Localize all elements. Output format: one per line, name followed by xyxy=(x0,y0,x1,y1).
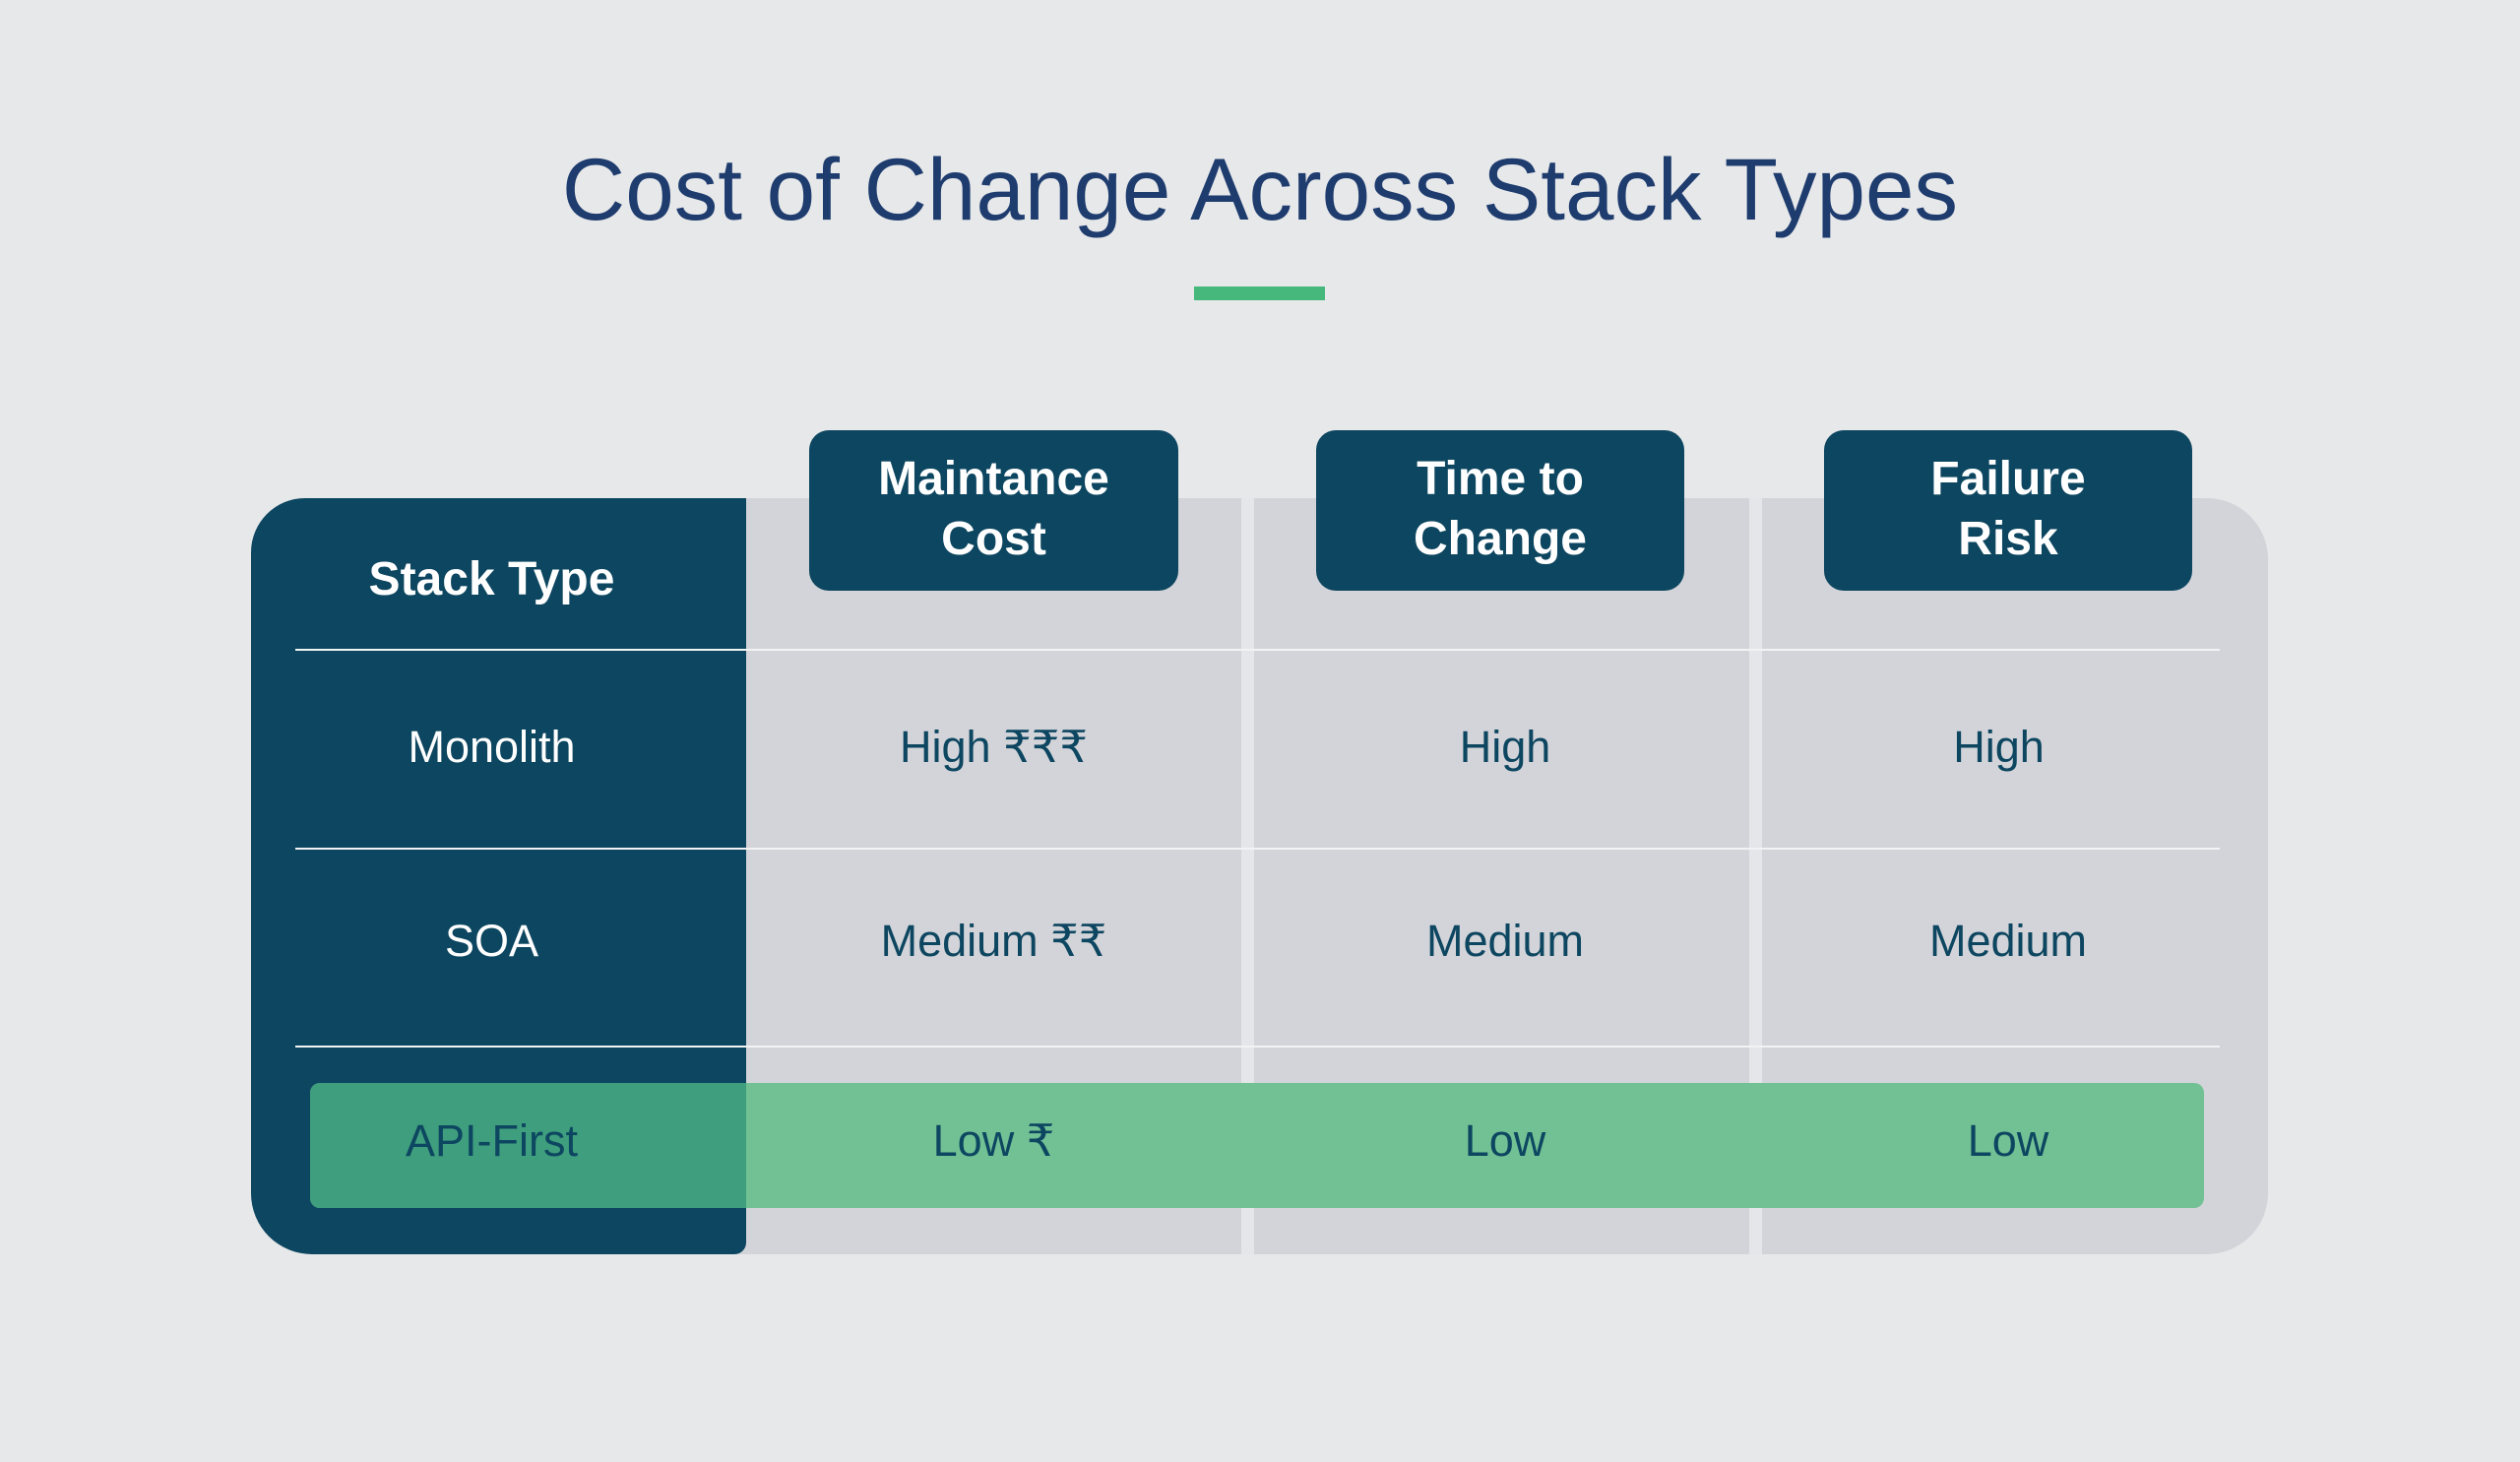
row: SOA: Medium xyxy=(1929,916,2087,966)
header: Time to Change: Change xyxy=(1414,512,1587,565)
highlight row: API-First xyxy=(310,1083,2204,1208)
header: Maintance Cost: Maintance xyxy=(878,453,1109,504)
row: SOA: SOA xyxy=(445,916,538,966)
row: Monolith: High xyxy=(1460,722,1550,772)
row: API-First: Low xyxy=(1968,1115,2048,1166)
row dividers xyxy=(295,649,2220,651)
row: API-First: Low ₹ xyxy=(933,1115,1054,1166)
table xyxy=(251,498,2268,1254)
row: Monolith xyxy=(408,722,2045,772)
title: Cost of Change Across Stack Types xyxy=(562,140,1958,238)
row: API-First: Low xyxy=(1465,1115,1545,1166)
row: SOA: Medium xyxy=(1426,916,1584,966)
row: SOA: Medium ₹₹ xyxy=(881,916,1106,966)
header: Maintance Cost: Cost xyxy=(941,512,1046,565)
header: Stack Type: Stack Type xyxy=(369,553,614,605)
header: Failure Risk: Risk xyxy=(1958,512,2058,565)
row: SOA xyxy=(445,916,2087,966)
header: Maintance Cost xyxy=(809,430,1178,591)
row: Monolith: High ₹₹₹ xyxy=(900,722,1088,772)
row: API-First: API-First xyxy=(406,1115,578,1166)
header: Failure Risk xyxy=(1824,430,2192,591)
row: Monolith: High xyxy=(1953,722,2045,772)
row: Monolith: Monolith xyxy=(408,722,576,772)
row: API-First xyxy=(406,1115,2049,1166)
title underline accent xyxy=(1194,286,1325,300)
header: Time to Change xyxy=(1316,430,1684,591)
header: Failure Risk: Failure xyxy=(1930,453,2086,504)
dark stack type column xyxy=(251,498,746,1254)
header: Time to Change: Time to xyxy=(1417,453,1584,504)
gray panel xyxy=(684,498,2268,1254)
